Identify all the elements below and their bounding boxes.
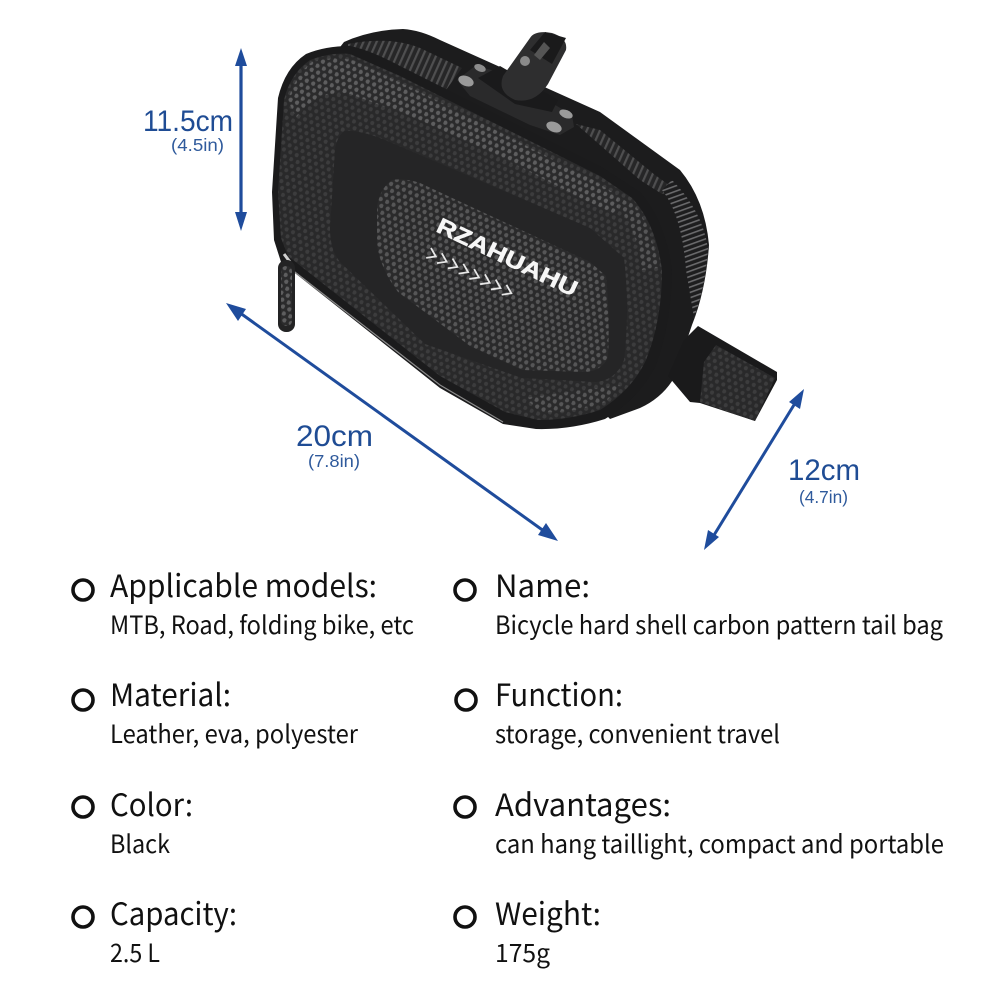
spec: name: Bicycle hard shell carbon pattern tail bag (495, 606, 943, 642)
recessed panel (330, 131, 627, 382)
spec: material (73, 670, 358, 751)
spec: material: Leather, eva, polyester (110, 715, 358, 751)
zipper ribbing right (576, 124, 676, 194)
spec: color (73, 780, 193, 861)
spec: weight: 175g (495, 934, 550, 970)
light sheen right side (618, 198, 658, 270)
spec: applicable models: MTB, Road, folding bike, etc (110, 606, 414, 642)
dotted inner panel (377, 179, 609, 372)
dimension: height arrow (143, 48, 247, 231)
spec: capacity: 2.5 L (110, 934, 160, 970)
spec: capacity: Capacity: (110, 889, 237, 934)
spec: applicable models: Applicable models: (110, 561, 377, 606)
length label inches: (7.8in) (308, 451, 360, 471)
light sheen bottom (525, 385, 620, 412)
spec: advantages: Advantages: (495, 780, 671, 825)
mount bracket (457, 32, 574, 135)
dimension: width arrow (704, 389, 860, 550)
spec: function (456, 670, 780, 751)
product photo: tail bag (272, 29, 777, 429)
spec: function: Function: (495, 670, 623, 715)
spec: applicable models (73, 561, 414, 642)
brand wordmark: RZAHUAHU (433, 213, 582, 301)
spec: material: Material: (110, 670, 231, 715)
spec: name: Name: (495, 561, 590, 606)
chevron marks (426, 248, 514, 298)
bag back shell (330, 29, 709, 419)
spec: name (455, 561, 943, 642)
height label inches: (4.5in) (171, 135, 224, 155)
spec: advantages (455, 780, 944, 861)
height label: 11.5cm (143, 105, 233, 138)
light sheen top-left (288, 58, 625, 214)
width label inches: (4.7in) (799, 487, 848, 507)
bottom edge highlight (282, 262, 503, 422)
zipper ribbing top (348, 41, 462, 90)
zipper pull (278, 254, 295, 332)
spec: weight: Weight: (495, 889, 601, 934)
front shell texture (278, 54, 662, 420)
spec: color: Color: (110, 780, 193, 825)
spec: function: storage, convenient travel (495, 715, 780, 751)
width label: 12cm (788, 454, 860, 487)
spec: weight (455, 889, 601, 970)
spec: color: Black (110, 825, 170, 861)
bag front shell (272, 46, 672, 429)
spec: advantages: can hang taillight, compact and portable (495, 825, 944, 861)
length label: 20cm (296, 420, 373, 453)
spec: capacity (73, 889, 237, 970)
bag strap (668, 326, 777, 421)
dimension: length arrow (226, 303, 558, 541)
